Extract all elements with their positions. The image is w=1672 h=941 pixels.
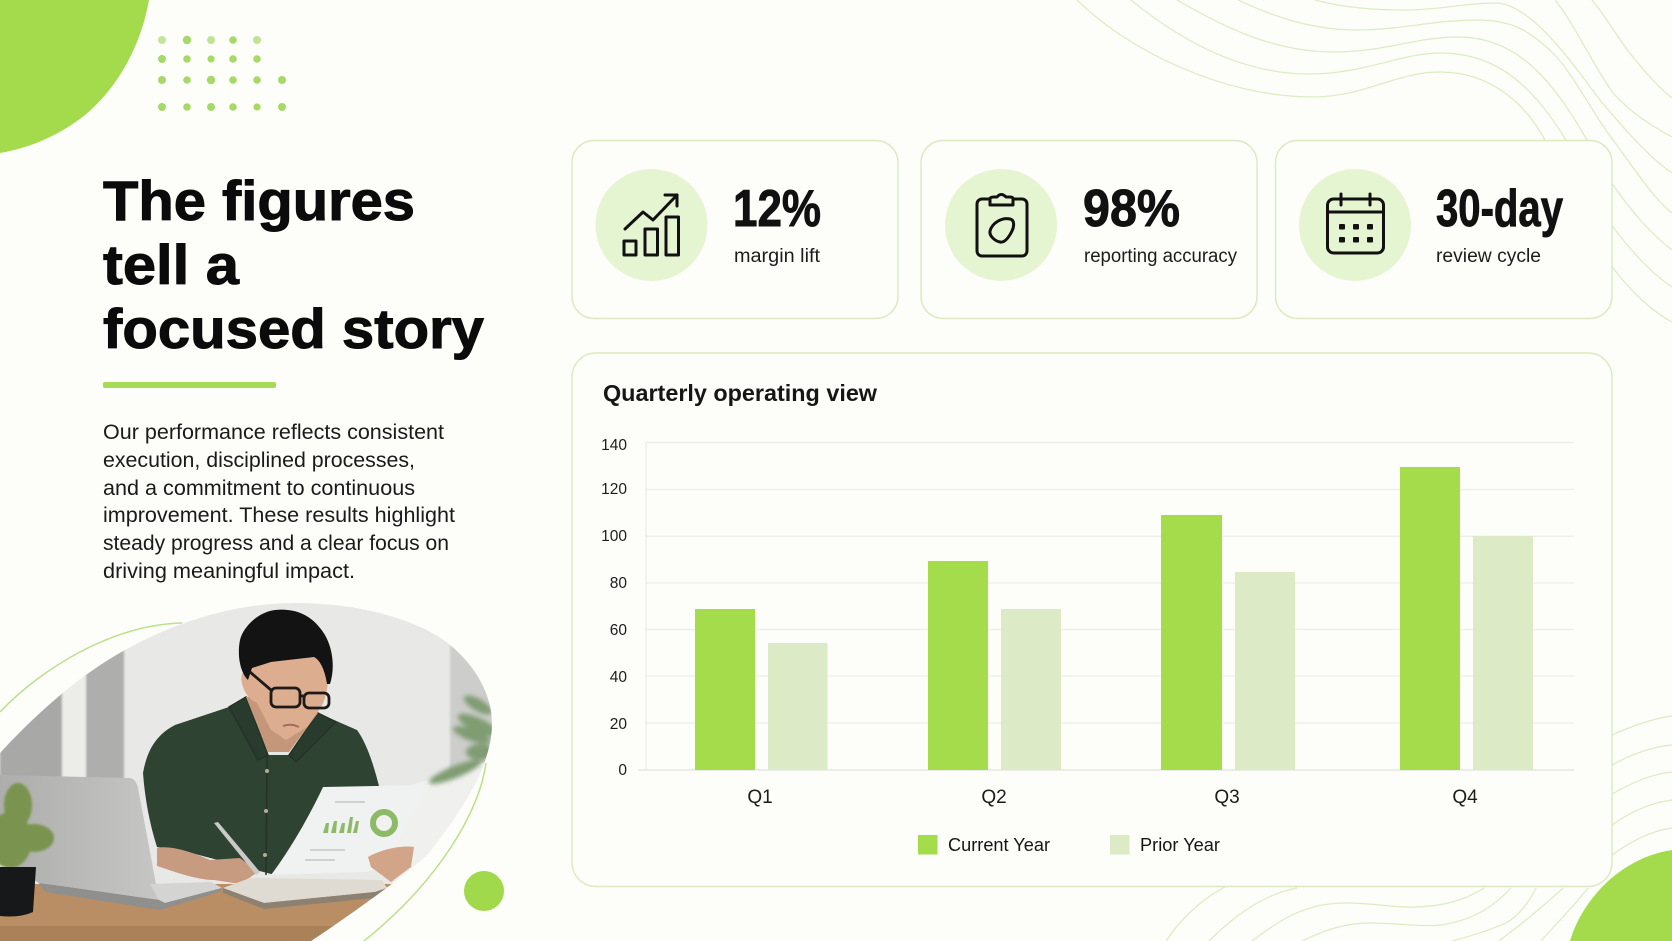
title underline: [103, 382, 276, 388]
notebook: [223, 878, 387, 903]
title: focused story: [103, 297, 484, 360]
y axis labels: [601, 437, 627, 779]
report sheet: [271, 785, 430, 875]
glasses: [250, 672, 329, 708]
stat card: review cycle: [1276, 140, 1612, 318]
body paragraph: and a commitment to continuous: [103, 477, 415, 500]
stat card: margin lift: [572, 140, 898, 318]
body paragraph: Our performance reflects consistent: [103, 421, 444, 444]
y axis labels: 80: [610, 575, 627, 592]
stat card: margin lift: margin lift: [734, 246, 821, 267]
green blob: bottom right: [1570, 850, 1672, 941]
gridlines and axis: [638, 442, 1574, 770]
forearm and hand with pen: [157, 847, 258, 884]
decorative waves: top right: [1077, 0, 1672, 322]
bars: Q2: [928, 561, 1061, 770]
stat card: reporting accuracy: reporting accuracy: [1084, 246, 1237, 267]
buttons: [265, 769, 269, 773]
x axis labels: [747, 787, 1478, 808]
shirt: [143, 697, 380, 875]
mouth: [283, 725, 299, 727]
right hand: [368, 847, 414, 882]
body paragraph: steady progress and a clear focus on: [103, 532, 449, 555]
title: [103, 169, 484, 360]
y axis labels: 60: [610, 622, 627, 639]
chart heading: Quarterly operating view: [603, 380, 877, 406]
sheet mini chart: [323, 817, 359, 833]
y axis labels: 0: [618, 762, 627, 779]
body paragraph: execution, disciplined processes,: [103, 449, 415, 472]
x axis labels: Q1: [747, 787, 773, 808]
body paragraph: driving meaningful impact.: [103, 560, 355, 583]
title: tell a: [103, 233, 240, 296]
body paragraph: [103, 421, 455, 583]
thin arcs around photo: [0, 623, 486, 941]
x axis labels: Q4: [1452, 787, 1478, 808]
legend: Current Year: [948, 834, 1050, 855]
y axis labels: 140: [601, 437, 627, 454]
sheet text lines: [305, 802, 365, 860]
legend: Prior Year: [1140, 834, 1220, 855]
y axis labels: 120: [601, 481, 627, 498]
plant right: [426, 692, 492, 787]
stat card: reporting accuracy: 98%: [1083, 180, 1180, 238]
legend: [918, 834, 1220, 855]
bars: Q1: [695, 609, 828, 770]
stat card: review cycle: 30-day: [1436, 180, 1563, 238]
decorative waves: bottom right: [1166, 716, 1672, 941]
stat card: review cycle: review cycle: [1436, 246, 1541, 267]
green accent dot: [464, 871, 504, 911]
x axis labels: Q2: [981, 787, 1007, 808]
y axis labels: 40: [610, 669, 627, 686]
panel: quarterly chart: [572, 353, 1612, 886]
icon: calendar: [1299, 169, 1411, 281]
title: The figures: [103, 169, 415, 232]
bars: Q4: [1400, 467, 1533, 770]
x axis labels: Q3: [1214, 787, 1240, 808]
hair: [239, 610, 333, 684]
y axis labels: 100: [601, 528, 627, 545]
neck: [246, 695, 318, 752]
photo: man reviewing report at desk: [0, 603, 501, 941]
green blob: top left: [0, 0, 149, 153]
body paragraph: improvement. These results highlight: [103, 504, 455, 527]
icon: clipboard: [945, 169, 1057, 281]
lower right wall: [448, 762, 484, 792]
face: [241, 655, 329, 740]
plant left and pot: [0, 783, 54, 916]
dot grid: [158, 36, 286, 111]
person: [143, 610, 430, 909]
desk: [0, 884, 430, 941]
stat card: margin lift: 12%: [733, 180, 821, 238]
bars: Q3: [1161, 515, 1295, 770]
icon: growth chart: [596, 169, 708, 281]
laptop: [0, 775, 222, 910]
y axis labels: 20: [610, 716, 627, 733]
stat card: reporting accuracy: [921, 140, 1257, 318]
